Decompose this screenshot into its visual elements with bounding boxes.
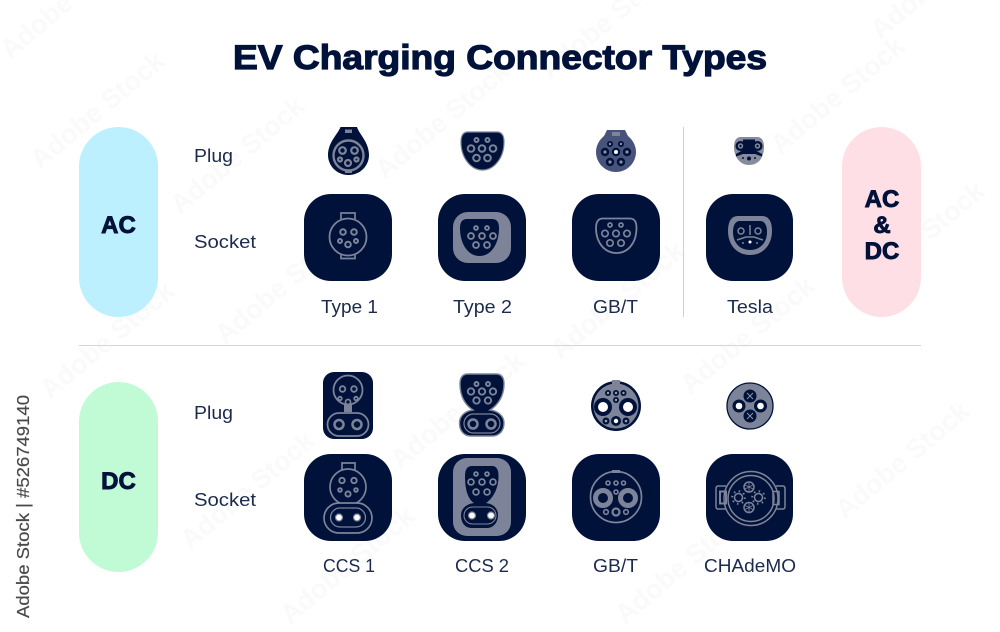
- panel: AC and DC pill: &: [873, 212, 891, 239]
- text: Adobe Stock: [370, 55, 516, 185]
- text: Adobe Stock: [845, 175, 991, 305]
- text: Adobe Stock: [35, 275, 181, 405]
- icon: Type 2 plug: [461, 132, 504, 170]
- text: Adobe Stock: [210, 220, 356, 350]
- text: Adobe Stock: [275, 500, 421, 630]
- icon: Tesla plug: [734, 137, 764, 165]
- text: Adobe Stock: [165, 90, 311, 220]
- connector name: CCS 2: CCS 2: [455, 556, 509, 576]
- text: Adobe Stock: [610, 500, 756, 630]
- icon: GB/T AC socket: [572, 194, 660, 281]
- panel: AC and DC pill: AC: [865, 186, 899, 213]
- connector name: Tesla: Tesla: [727, 297, 774, 317]
- connector name: Type 1: Type 1: [321, 297, 378, 317]
- row label: DC socket: Socket: [194, 490, 256, 510]
- text: Adobe Stock: [765, 30, 911, 160]
- icon: GB/T AC plug: [596, 130, 636, 172]
- icon: GB/T DC plug: [591, 380, 641, 431]
- text: Adobe Stock: [385, 345, 531, 475]
- icon: CCS 2 plug: [460, 374, 504, 436]
- stock credit: Adobe Stock | #526749140: [13, 395, 33, 618]
- panel: AC pill: AC: [101, 212, 136, 239]
- text: Adobe Stock: [830, 395, 976, 525]
- panel: DC pill: [79, 382, 158, 572]
- panel: AC and DC pill: DC: [865, 238, 899, 265]
- panel: AC and DC pill: [842, 127, 921, 317]
- row label: AC plug: Plug: [194, 146, 233, 166]
- text: Adobe Stock: [175, 425, 321, 555]
- text: Adobe Stock: [545, 235, 691, 365]
- icon: CCS 2 socket: [438, 454, 526, 541]
- icon: Type 1 plug: [328, 127, 369, 175]
- row label: AC socket: Socket: [194, 232, 256, 252]
- connector name: CCS 1: CCS 1: [323, 556, 375, 576]
- panel: AC pill: [79, 127, 158, 317]
- title: EV Charging Connector Types: [233, 39, 767, 77]
- connector name: GB/T AC: GB/T: [593, 297, 638, 317]
- icon: CHAdeMO plug: [727, 383, 773, 429]
- icon: CCS 1 socket: [304, 454, 392, 541]
- icon: Type 2 socket: [438, 194, 526, 281]
- icon: Tesla socket: [706, 194, 793, 281]
- icon: GB/T DC socket: [572, 454, 660, 541]
- connector name: GB/T DC: GB/T: [593, 556, 638, 576]
- icon: CHAdeMO socket: [706, 454, 793, 541]
- icon: CCS 1 plug: [323, 372, 373, 439]
- icon: Type 1 socket: [304, 194, 392, 281]
- connector name: CHAdeMO: CHAdeMO: [704, 556, 796, 576]
- connector name: Type 2: Type 2: [453, 297, 512, 317]
- text: Adobe Stock: [25, 45, 171, 175]
- text: Adobe Stock: [675, 270, 821, 400]
- row label: DC plug: Plug: [194, 403, 233, 423]
- panel: DC pill: DC: [101, 468, 136, 495]
